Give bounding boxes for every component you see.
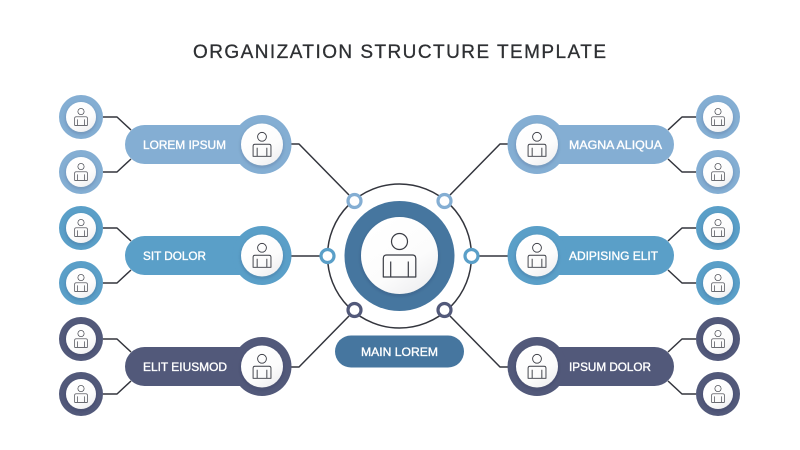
branch: Elit Eiusmod: [59, 317, 292, 416]
node: bottom left: [348, 304, 361, 316]
center hub: [291, 144, 508, 367]
branch: Magna Aliqua: MAGNA ALIQUA: [569, 138, 662, 152]
hub white circle: [361, 217, 438, 294]
main label: MAIN LOREM: [361, 345, 438, 359]
main label: [335, 336, 464, 368]
icon: main person: [383, 234, 416, 277]
node: middle left: [321, 250, 334, 262]
branch: Adipising Elit: [508, 206, 740, 305]
connectors from hub: [291, 144, 508, 367]
title: ORGANIZATION STRUCTURE TEMPLATE: [193, 42, 606, 63]
branch: Lorem Ipsum: [59, 95, 292, 194]
hub disc: [344, 201, 454, 311]
node: middle right: [465, 250, 478, 262]
branch: Sit Dolor: [59, 206, 292, 305]
outer ring: [328, 184, 472, 328]
branch: Adipising Elit: ADIPISING ELIT: [569, 249, 659, 263]
branch: Sit Dolor: SIT DOLOR: [143, 249, 206, 263]
node: top left: [348, 194, 361, 208]
node: bottom right: [438, 304, 451, 316]
branch: Elit Eiusmod: ELIT EIUSMOD: [143, 360, 227, 374]
branch: Ipsum Dolor: [508, 317, 740, 416]
branch: Magna Aliqua: [508, 95, 740, 194]
node: top right: [438, 194, 451, 208]
branch: Lorem Ipsum: LOREM IPSUM: [143, 138, 226, 152]
branch: Ipsum Dolor: IPSUM DOLOR: [569, 360, 651, 374]
